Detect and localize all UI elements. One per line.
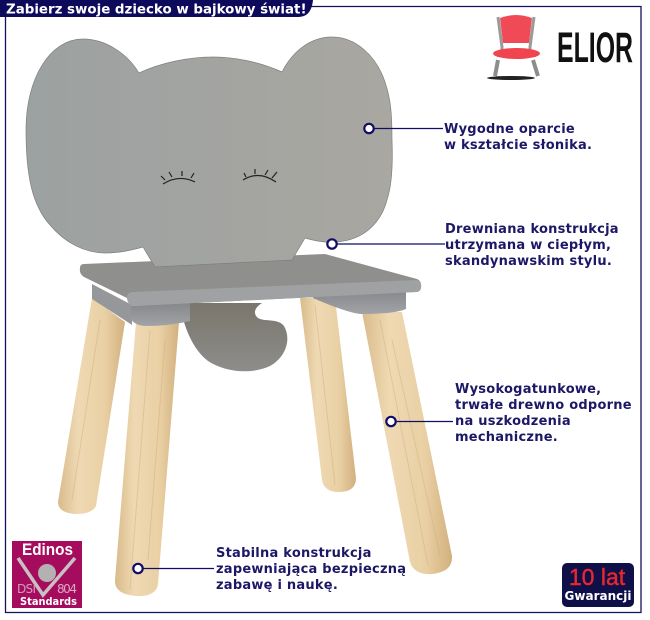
badge: Edinos standards: 804 xyxy=(57,582,77,596)
back-left leg xyxy=(58,298,125,514)
right eye xyxy=(243,169,277,182)
badge: 10 year warranty: 10 lat xyxy=(569,564,626,590)
callout: construction: skandynawskim stylu. xyxy=(445,254,612,269)
badge: Edinos standards xyxy=(12,540,82,608)
front-right leg xyxy=(362,312,452,574)
callout: construction: Drewniana konstrukcja xyxy=(445,222,619,237)
callout: stability: zabawę i naukę. xyxy=(216,578,338,593)
callout: stability: zapewniająca bezpieczną xyxy=(216,562,406,577)
callout: backrest: Wygodne oparcie xyxy=(444,122,575,137)
back-right leg xyxy=(300,298,356,492)
badge: 10 year warranty xyxy=(562,563,634,607)
callout: wood: mechaniczne. xyxy=(455,430,558,445)
callout: wood xyxy=(386,382,632,445)
badge: Edinos standards: DSI xyxy=(17,582,36,596)
callout: backrest xyxy=(364,122,592,153)
logo: Elior chair xyxy=(487,15,633,80)
callout: wood: Wysokogatunkowe, xyxy=(455,382,601,397)
callout: stability xyxy=(133,546,406,593)
elephant backrest xyxy=(26,37,392,267)
icon: red chair xyxy=(487,15,540,80)
callout: wood: na uszkodzenia xyxy=(455,414,571,429)
chair illustration xyxy=(26,37,452,596)
callout: construction: utrzymana w ciepłym, xyxy=(445,238,611,253)
callout: backrest: w kształcie słonika. xyxy=(444,138,592,153)
left eye xyxy=(161,171,195,184)
front-left leg xyxy=(115,322,179,596)
seat underside and feet xyxy=(92,284,406,326)
callout: stability: Stabilna konstrukcja xyxy=(216,546,372,561)
callout: wood: trwałe drewno odporne xyxy=(455,398,632,413)
seat xyxy=(80,254,421,306)
badge: 10 year warranty: Gwarancji xyxy=(565,589,631,603)
callout: construction xyxy=(327,222,619,269)
title banner: Zabierz swoje dziecko w bajkowy świat! xyxy=(6,2,307,18)
elephant trunk xyxy=(184,303,287,371)
badge: Edinos standards: Edinos xyxy=(22,540,73,559)
badge: Edinos standards: Standards xyxy=(20,596,77,608)
